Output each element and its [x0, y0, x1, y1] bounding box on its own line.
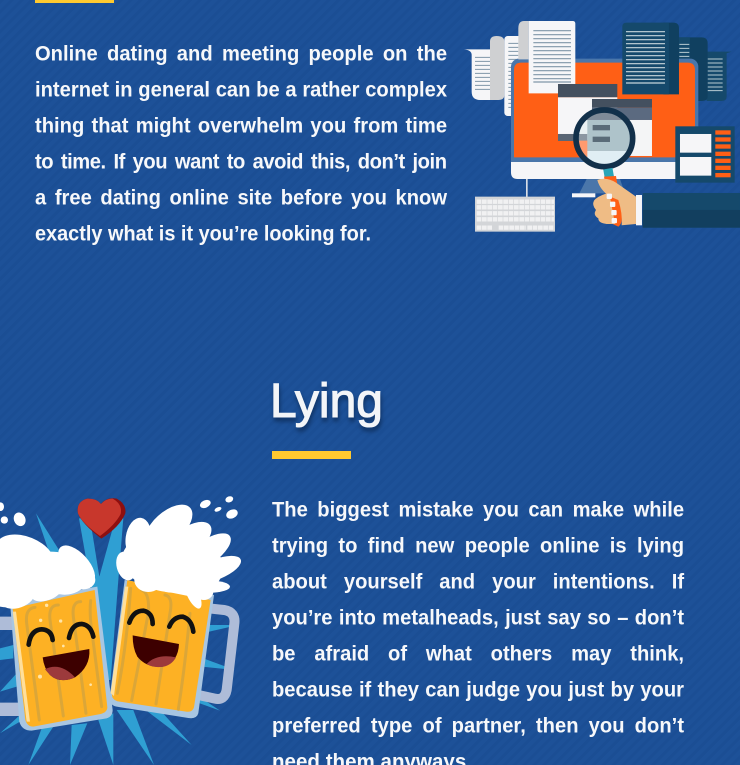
burst rays — [0, 513, 238, 765]
front white document — [518, 21, 575, 93]
heart — [78, 498, 125, 539]
left paper scrolls — [464, 36, 524, 116]
text block: lying paragraph: about yourself and your intentions. If — [272, 570, 684, 594]
text block: intro paragraph: a free dating online site before you know — [35, 186, 448, 210]
heading accent bar — [272, 451, 351, 459]
foam droplets — [0, 495, 239, 528]
text block: lying paragraph: preferred type of partner, then you don’t — [272, 714, 684, 738]
text block: intro paragraph: thing that might overwhelm you from time — [35, 114, 447, 138]
icon: computer with documents and magnifier — [464, 21, 740, 232]
hand holding magnifier — [572, 176, 740, 228]
right mug — [110, 496, 244, 718]
top accent bar — [35, 0, 114, 3]
text block: intro paragraph: Online dating and meeting people on the — [35, 42, 447, 66]
text block: intro paragraph: internet in general can be a rather complex — [35, 78, 448, 102]
heading: Lying: Lying — [270, 375, 383, 428]
keyboard — [475, 197, 555, 232]
text block: intro paragraph: to time. If you want to avoid this, don’t join — [35, 150, 447, 174]
side panel — [675, 126, 735, 183]
front dark document — [622, 23, 679, 94]
text block: lying paragraph: The biggest mistake you can make while — [272, 498, 684, 522]
magnifier lens — [573, 107, 637, 179]
text block: lying paragraph — [272, 498, 684, 765]
text block: lying paragraph: you’re into metalheads, just say so – don’t — [272, 606, 684, 630]
monitor — [511, 59, 698, 197]
text block: lying paragraph: trying to find new people online is lying — [272, 534, 684, 558]
text block: intro paragraph — [35, 42, 448, 246]
right mug face — [129, 611, 193, 632]
text block: intro paragraph: exactly what is it you’re looking for. — [35, 222, 371, 246]
browser windows — [558, 84, 652, 156]
left mug foam — [0, 527, 102, 613]
right dark documents — [677, 37, 732, 101]
left mug — [0, 527, 113, 731]
left mug face — [29, 624, 93, 645]
right mug foam — [113, 496, 244, 611]
text block: lying paragraph: be afraid of what others may think, — [272, 642, 684, 666]
icon: clinking beer mugs — [0, 495, 244, 765]
text block: lying paragraph: because if they can judge you just by your — [272, 678, 684, 702]
